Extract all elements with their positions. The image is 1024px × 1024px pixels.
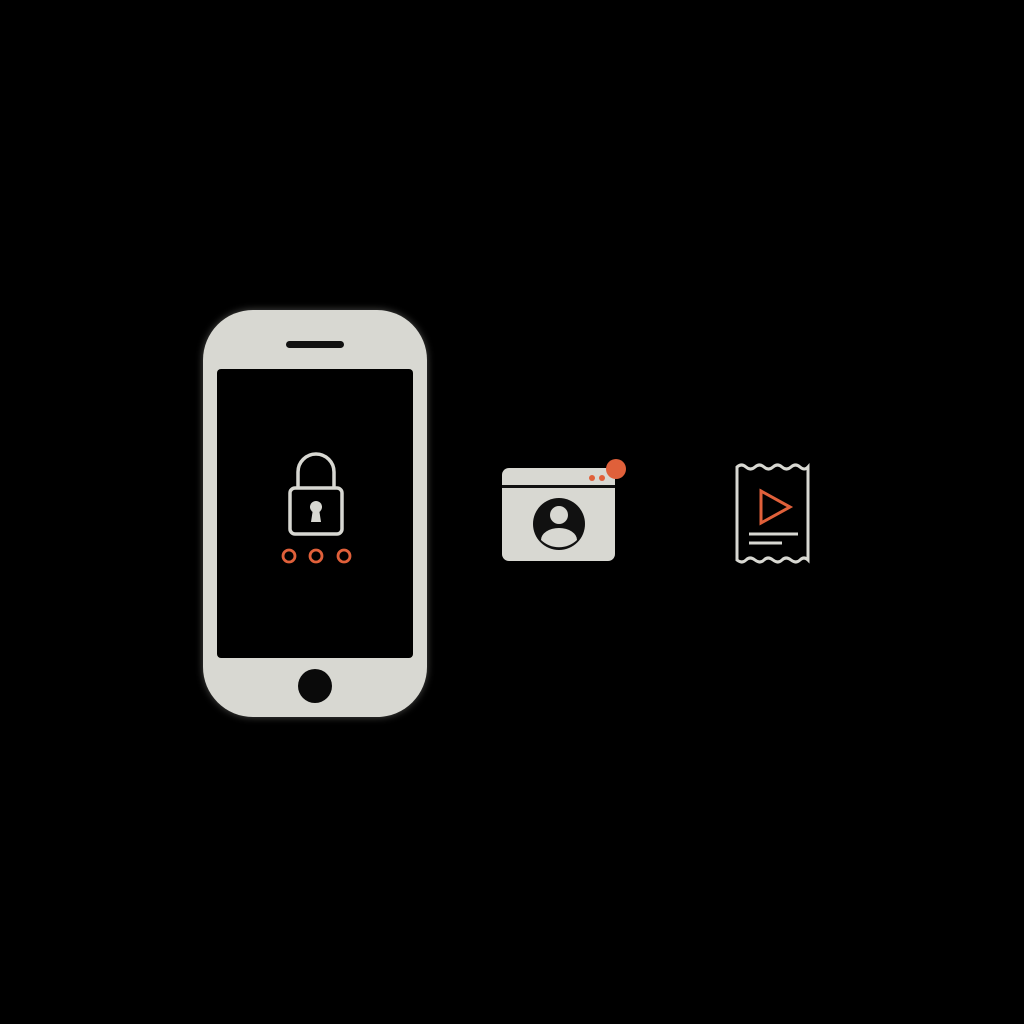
icon: smartphone xyxy=(203,310,427,717)
icon: browser profile window xyxy=(502,459,626,561)
icon: video ticket receipt xyxy=(737,465,808,562)
icon: padlock xyxy=(290,454,342,534)
passcode dots xyxy=(283,550,350,562)
